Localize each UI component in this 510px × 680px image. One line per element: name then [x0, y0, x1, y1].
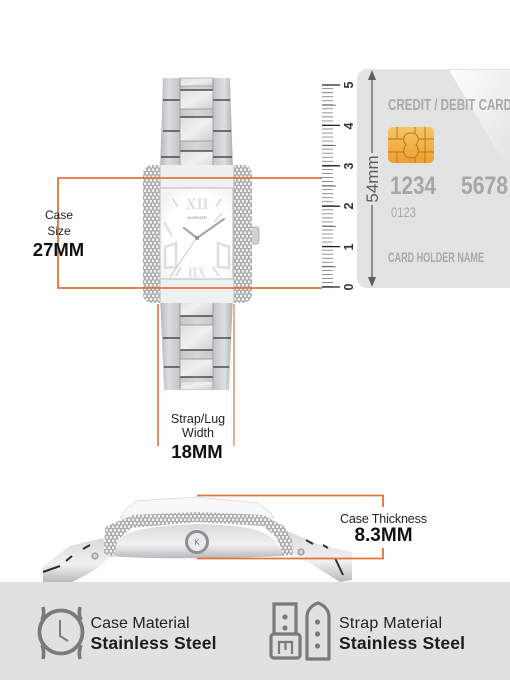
hands [184, 219, 224, 238]
strap material text [339, 615, 465, 653]
54mm arrow: 54mm [363, 155, 382, 203]
watch front view [143, 78, 259, 390]
ruler numbers: 2 [342, 202, 356, 209]
case size label: Case [45, 208, 73, 222]
top of case [120, 497, 274, 518]
case thickness label: 8.3MM [354, 525, 413, 546]
credit card [357, 69, 510, 288]
strap width label: Strap/Lug [171, 412, 225, 426]
crown side: K [194, 538, 200, 547]
case size label: 27MM [33, 239, 84, 260]
card number: 1234 [390, 172, 436, 200]
case thickness measure lines [197, 496, 383, 558]
watch side view [43, 497, 352, 582]
strap width measure lines [158, 304, 234, 446]
ruler numbers [342, 81, 356, 290]
ruler numbers: 5 [342, 81, 356, 88]
crown [251, 227, 259, 244]
pave band [104, 512, 293, 557]
case material text [90, 615, 216, 653]
bottom panel [0, 582, 510, 680]
ruler numbers: 4 [342, 122, 356, 129]
case size label [33, 208, 84, 260]
dial numerals: IIX [188, 265, 206, 281]
case body [112, 524, 283, 558]
case material text: Stainless Steel [90, 633, 216, 653]
card sheen [449, 70, 510, 172]
case material text: Case Material [90, 615, 190, 632]
case thickness label: Case Thickness [340, 512, 427, 526]
left bracelet [43, 538, 112, 582]
strap material text: Strap Material [339, 615, 442, 632]
strap material text: Stainless Steel [339, 633, 465, 653]
ruler [322, 81, 356, 290]
case thickness label [340, 512, 427, 546]
card chip [388, 127, 434, 163]
ruler numbers: 0 [342, 283, 356, 290]
card small number: 0123 [391, 204, 416, 220]
watch case [143, 165, 252, 303]
54mm arrow [363, 70, 382, 287]
icon: strap [271, 603, 329, 659]
dial numerals: XII [186, 196, 208, 213]
strap width label: Width [182, 426, 214, 440]
crown side [185, 530, 209, 554]
card number [390, 172, 508, 200]
right bracelet [285, 530, 352, 582]
case size label: Size [47, 224, 71, 238]
ruler numbers: 3 [342, 162, 356, 169]
case size measure lines [58, 178, 322, 288]
brand text: MICHAEL KORS [187, 215, 207, 220]
ruler numbers: 1 [342, 243, 356, 250]
dial numerals [164, 196, 229, 281]
upper bracelet [160, 78, 233, 172]
strap width label: 18MM [171, 441, 223, 462]
lower bracelet [160, 295, 233, 390]
icon: watch [40, 607, 82, 659]
strap width label [171, 412, 225, 462]
watch dial [160, 188, 233, 281]
